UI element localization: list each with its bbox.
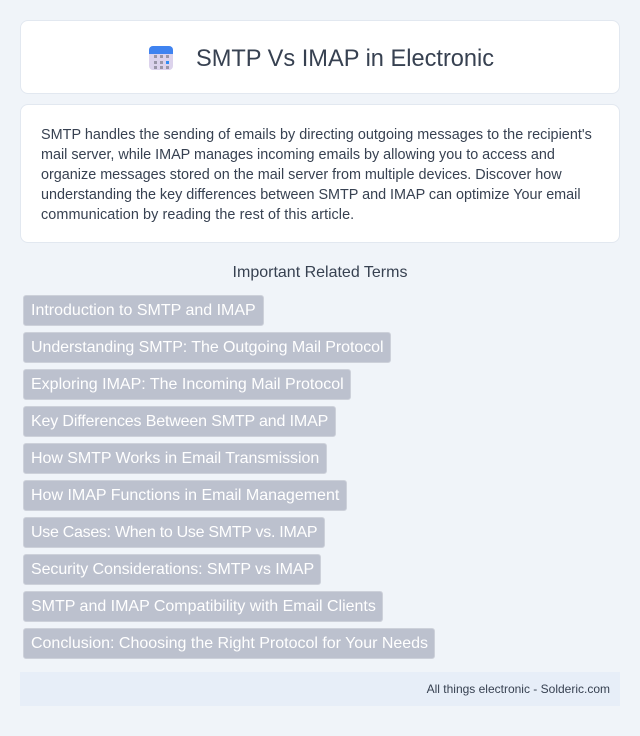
intro text: mail server, while IMAP manages incoming emails by allowing you to access and bbox=[41, 147, 555, 163]
intro text panel bbox=[20, 104, 620, 243]
term 4 bbox=[23, 406, 336, 437]
term 7: Use Cases: When to Use SMTP vs. IMAP bbox=[31, 524, 317, 541]
header panel bbox=[20, 20, 620, 94]
intro text: organize messages stored on the mail server from multiple devices. Discover how bbox=[41, 167, 562, 183]
term 10 bbox=[23, 628, 435, 659]
term 1: Introduction to SMTP and IMAP bbox=[31, 302, 256, 319]
intro text: communication by reading the rest of this article. bbox=[41, 207, 354, 223]
term 9 bbox=[23, 591, 383, 622]
term 3: Exploring IMAP: The Incoming Mail Protocol bbox=[31, 376, 344, 393]
title: SMTP Vs IMAP in Electronic bbox=[196, 46, 494, 72]
term 2 bbox=[23, 332, 391, 363]
term 9: SMTP and IMAP Compatibility with Email Clients bbox=[31, 598, 376, 615]
icon: calendar bbox=[149, 46, 173, 70]
footer text: All things electronic - Solderic.com bbox=[427, 682, 610, 696]
term 6: How IMAP Functions in Email Management bbox=[31, 487, 339, 504]
term 5 bbox=[23, 443, 327, 474]
intro text bbox=[41, 127, 592, 223]
term 1 bbox=[23, 295, 264, 326]
term 4: Key Differences Between SMTP and IMAP bbox=[31, 413, 328, 430]
related terms list bbox=[23, 295, 435, 659]
term 3 bbox=[23, 369, 351, 400]
footer bar bbox=[20, 672, 620, 706]
intro text: understanding the key differences between SMTP and IMAP can optimize Your email bbox=[41, 187, 581, 203]
term 5: How SMTP Works in Email Transmission bbox=[31, 450, 319, 467]
term 10: Conclusion: Choosing the Right Protocol for Your Needs bbox=[31, 635, 428, 652]
related terms heading: Important Related Terms bbox=[233, 264, 407, 281]
intro text: SMTP handles the sending of emails by directing outgoing messages to the recipient's bbox=[41, 127, 592, 143]
term 7 bbox=[23, 517, 325, 548]
term 6 bbox=[23, 480, 347, 511]
term 8: Security Considerations: SMTP vs IMAP bbox=[31, 561, 314, 578]
term 8 bbox=[23, 554, 321, 585]
term 2: Understanding SMTP: The Outgoing Mail Protocol bbox=[31, 339, 384, 356]
